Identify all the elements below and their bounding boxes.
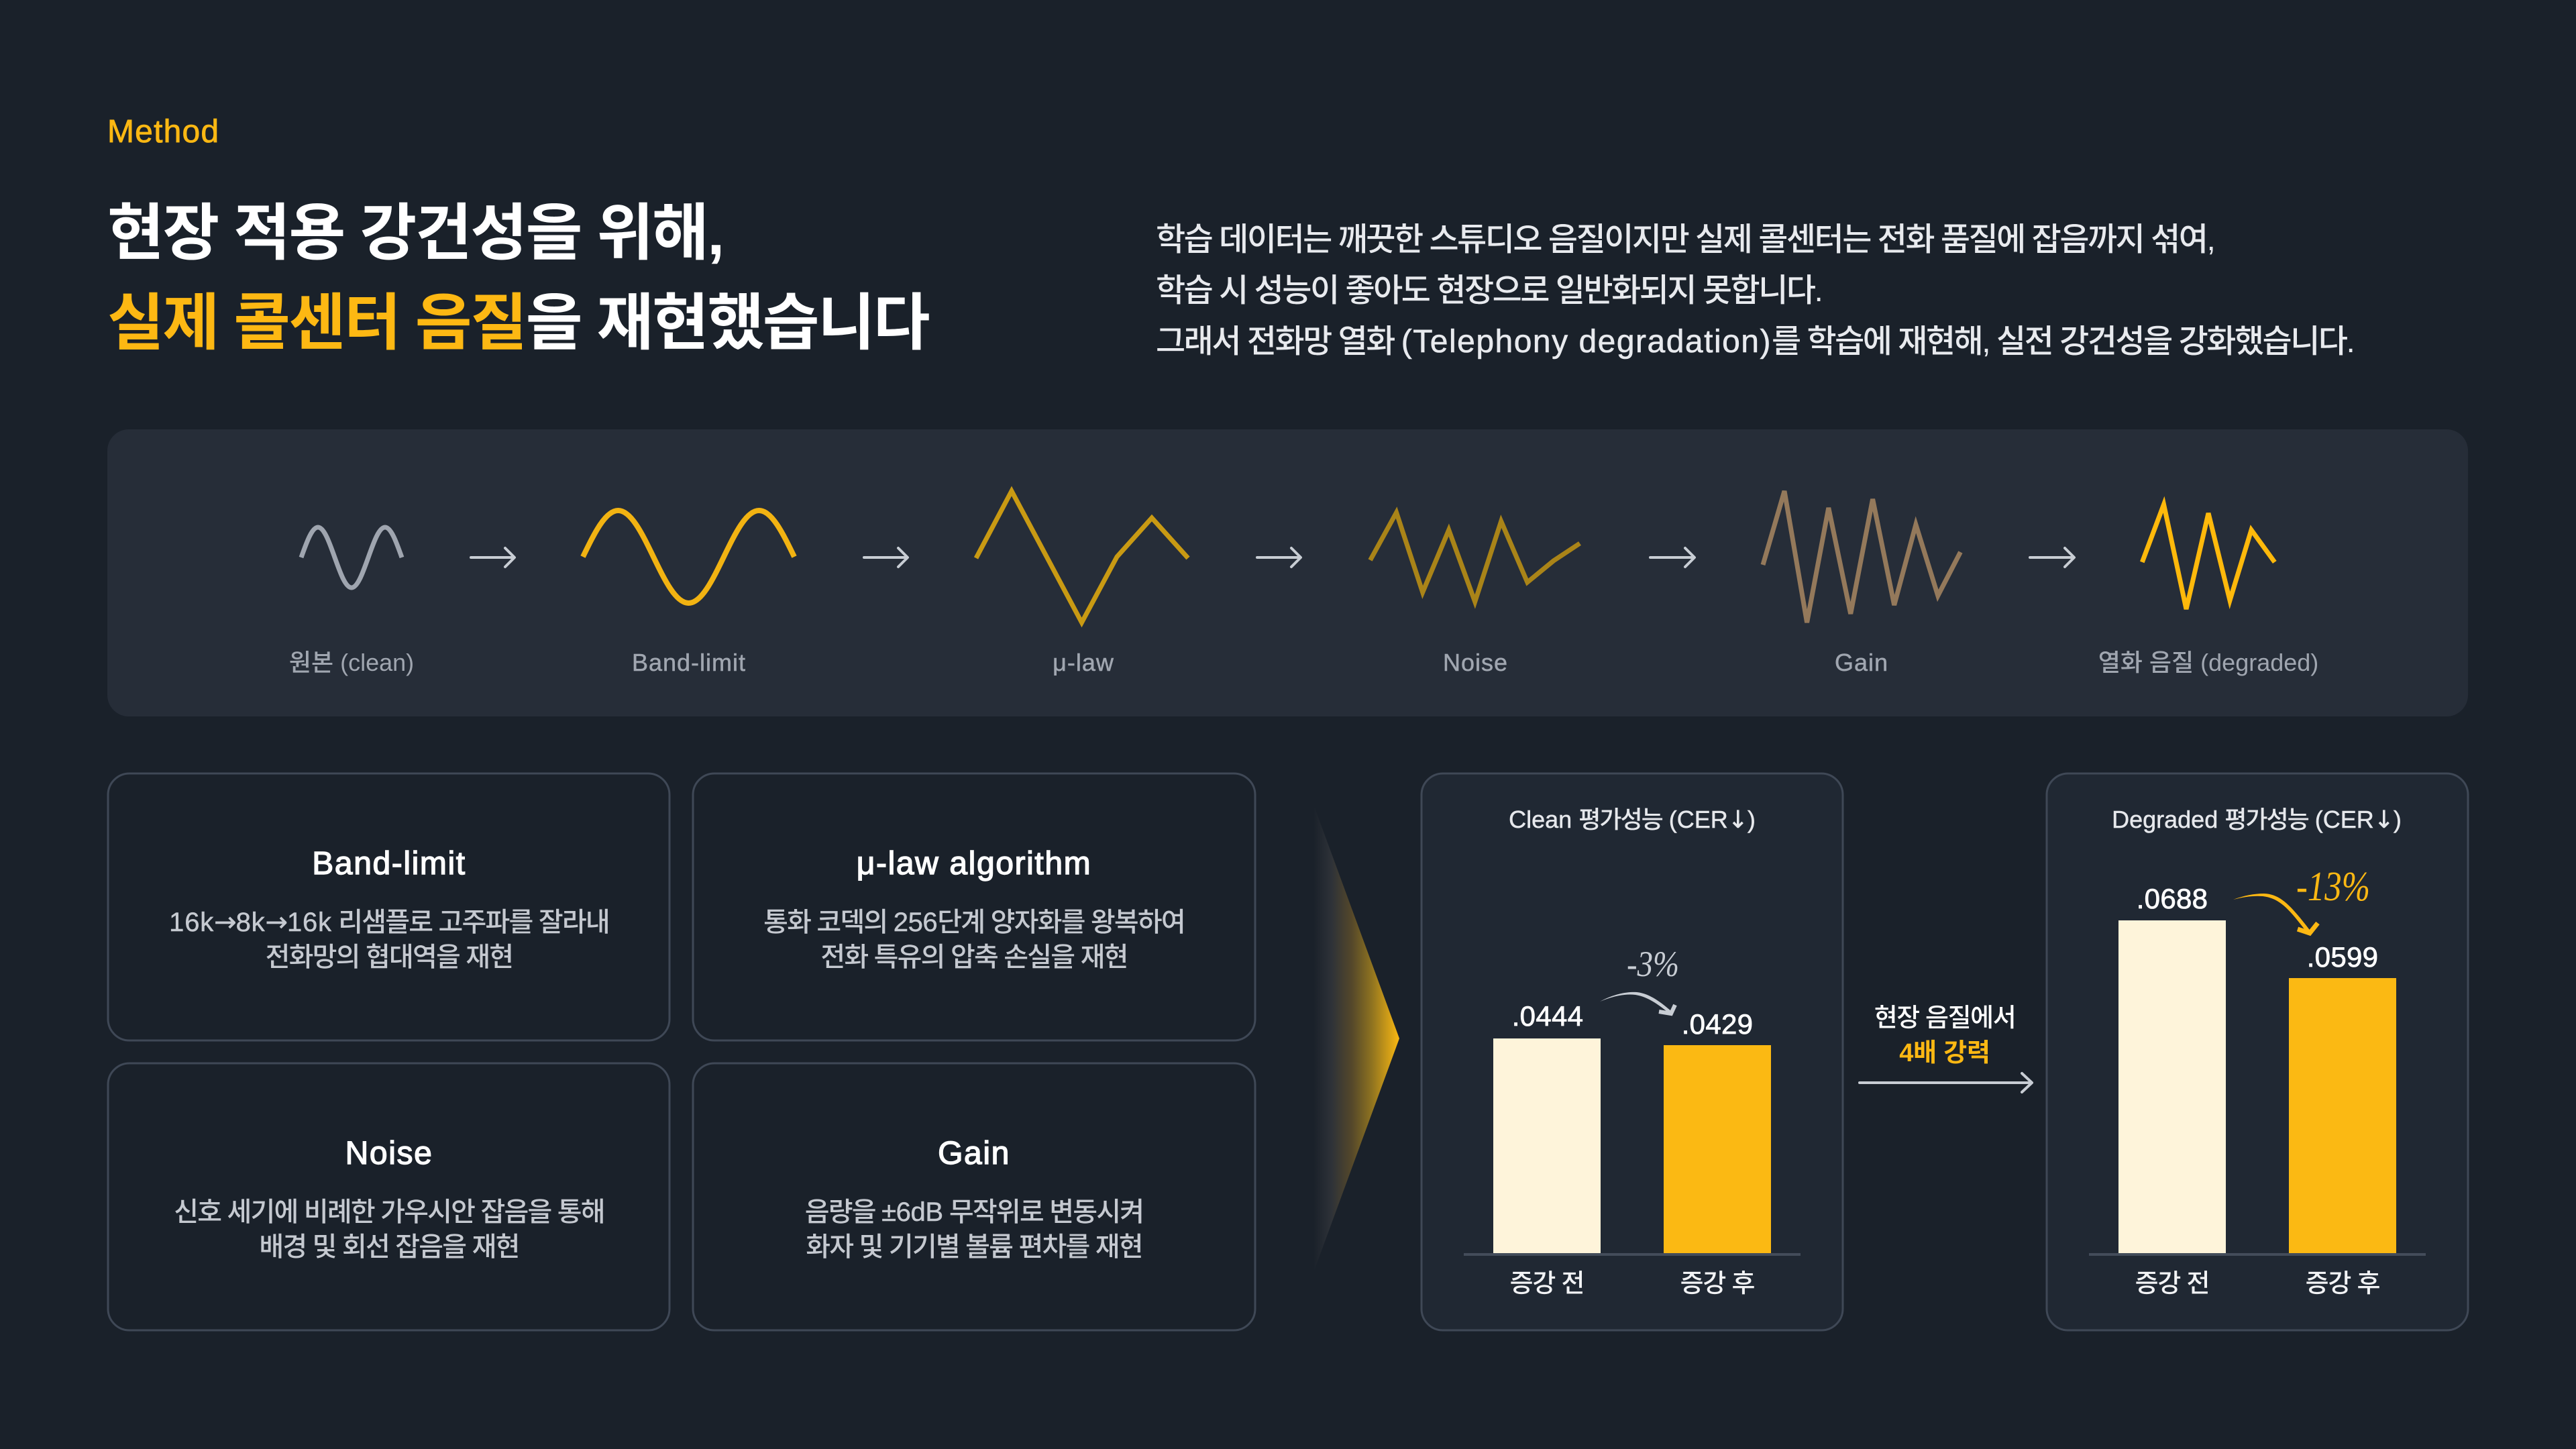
chart panel: Degraded [2047, 773, 2468, 1330]
wave: degraded [2098, 504, 2318, 676]
annotation: -13% [2233, 864, 2370, 934]
card: Band-limit: Band-limit [312, 846, 466, 881]
wave: mu-law: μ-law [1053, 649, 1114, 676]
title: 현장 적용 강건성을 위해, [107, 199, 723, 268]
wave: band-limit: Band-limit [632, 649, 746, 676]
card: Gain: 화자 및 기기별 볼륨 편차를 재현 [806, 1232, 1142, 1262]
card: Gain: 음량을 ±6dB 무작위로 변동시켜 [805, 1197, 1143, 1227]
card: Noise: Noise [345, 1136, 433, 1171]
card: mu-law algorithm: 전화 특유의 압축 손실을 재현 [820, 943, 1128, 972]
arrow 3 [1257, 548, 1301, 567]
arrow 5 [2030, 548, 2074, 567]
title: 실제 콜센터 음질을 재현했습니다 [107, 289, 929, 358]
wave: clean [289, 527, 414, 676]
chart panel: Clean: 증강 전 [1510, 1270, 1584, 1298]
wave: clean: 원본 (clean) [289, 649, 414, 676]
annotation: -3% [1600, 944, 1679, 1014]
arrow 1 [471, 548, 515, 567]
chart panel: Clean [1421, 773, 1843, 1330]
bar: degraded before [2118, 883, 2226, 1253]
description text block: 학습 시 성능이 좋아도 현장으로 일반화되지 못합니다. [1156, 273, 1821, 309]
card: Gain: Gain [938, 1136, 1010, 1171]
arrow 4 [1650, 548, 1695, 567]
card: Band-limit: 전화망의 협대역을 재현 [266, 943, 513, 972]
card: Noise [108, 1063, 669, 1330]
annotation: -13%: -13% [2296, 864, 2370, 910]
card: Band-limit: 16k→8k→16k 리샘플로 고주파를 잘라내 [169, 907, 609, 938]
chart panel: Degraded: 증강 전 [2135, 1270, 2209, 1298]
callout: 4x stronger in field audio [1860, 1004, 2032, 1092]
description text block: 학습 데이터는 깨끗한 스튜디오 음질이지만 실제 콜센터는 전화 품질에 잡음까지 섞여, [1156, 222, 2214, 258]
title [107, 199, 929, 358]
card: mu-law algorithm: 통화 코덱의 256단계 양자화를 왕복하여 [763, 908, 1185, 937]
description text block: 그래서 전화망 열화 (Telephony degradation)를 학습에 재현해, 실전 강건성을 강화했습니다. [1156, 324, 2353, 360]
wave: noise: Noise [1443, 649, 1508, 676]
chart panel: Degraded: 증강 후 [2306, 1270, 2380, 1298]
chart panel: Degraded: Degraded 평가성능 (CER↓) [2112, 806, 2402, 834]
callout: 4x stronger in field audio: 4배 강력 [1899, 1039, 1990, 1067]
description text block [1156, 222, 2353, 360]
wave: mu-law [976, 491, 1188, 676]
bar: clean after: .0429 [1682, 1008, 1753, 1040]
gradient chevron arrow [1313, 804, 1399, 1273]
chart panel: Clean: 증강 후 [1680, 1270, 1755, 1298]
arrow 2 [864, 548, 908, 567]
bar: clean before: .0444 [1512, 1000, 1583, 1032]
bar: degraded after: .0599 [2307, 941, 2378, 973]
card: mu-law algorithm: μ-law algorithm [857, 846, 1091, 881]
eyebrow: Method: Method [107, 114, 219, 150]
panel: degradation pipeline [107, 429, 2468, 716]
bar: degraded before: .0688 [2137, 883, 2208, 914]
card: Gain [693, 1063, 1255, 1330]
wave: noise [1371, 513, 1580, 676]
wave: gain: Gain [1835, 649, 1888, 676]
card: Band-limit [108, 773, 669, 1040]
card: Noise: 배경 및 회선 잡음을 재현 [259, 1232, 519, 1262]
chart panel: Clean: Clean 평가성능 (CER↓) [1509, 806, 1756, 834]
wave: band-limit [583, 511, 794, 676]
annotation: -3%: -3% [1627, 944, 1679, 984]
card: mu-law algorithm [693, 773, 1255, 1040]
bar: clean after [1664, 1008, 1771, 1253]
bar: degraded after [2289, 941, 2396, 1253]
card: Noise: 신호 세기에 비례한 가우시안 잡음을 통해 [174, 1197, 604, 1227]
callout: 4x stronger in field audio: 현장 음질에서 [1874, 1004, 2015, 1032]
wave: gain [1763, 491, 1960, 676]
wave: degraded: 열화 음질 (degraded) [2098, 649, 2318, 676]
bar: clean before [1493, 1000, 1601, 1253]
